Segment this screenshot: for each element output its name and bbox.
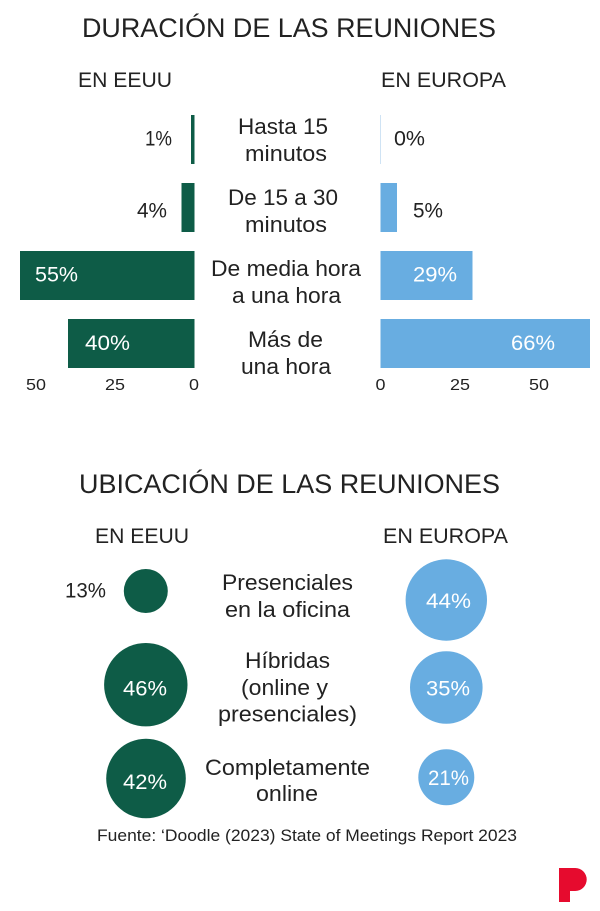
heading: en Europa ubicación: EN EUROPA bbox=[383, 524, 509, 548]
text block: categorías de ubicación: (online y bbox=[241, 675, 328, 700]
text block: categorías de duración bbox=[211, 114, 362, 379]
icon: logo P bbox=[559, 868, 587, 902]
bar chart: Europa duración: 5% bbox=[413, 198, 443, 222]
text block: categorías de duración: De 15 a 30 bbox=[228, 185, 338, 210]
title: ubicación: UBICACIÓN DE LAS REUNIONES bbox=[79, 468, 500, 499]
bar chart: Europa duración bbox=[376, 115, 590, 394]
text block: categorías de duración: Más de bbox=[248, 327, 323, 352]
bubble chart: Europa ubicación: 44% bbox=[426, 589, 471, 613]
bubble chart: Europa ubicación: 35% bbox=[426, 676, 470, 700]
title: duración: DURACIÓN DE LAS REUNIONES bbox=[82, 12, 496, 43]
bar chart: EEUU duración: 0 bbox=[189, 377, 199, 394]
text block: categorías de duración: minutos bbox=[245, 212, 327, 237]
bar chart: Europa duración: 0% bbox=[394, 126, 425, 150]
bar chart: EEUU duración: 50 bbox=[26, 377, 46, 394]
text block: categorías de ubicación: Presenciales bbox=[222, 570, 353, 595]
bubble chart: EEUU ubicación: 42% bbox=[123, 770, 167, 794]
bar chart: Europa duración: 25 bbox=[450, 377, 470, 394]
text block: categorías de ubicación: Híbridas bbox=[245, 648, 330, 673]
text block: categorías de duración: De media hora bbox=[211, 256, 362, 281]
bubble chart: EEUU ubicación: 13% bbox=[65, 578, 106, 602]
text block: categorías de duración: minutos bbox=[245, 141, 327, 166]
text block: categorías de duración: una hora bbox=[241, 354, 332, 379]
bar chart: Europa duración: 66% bbox=[511, 331, 555, 355]
heading: en EEUU ubicación: EN EEUU bbox=[95, 524, 189, 548]
text block: categorías de ubicación: online bbox=[256, 781, 318, 806]
source note: Fuente: ‘Doodle (2023) State of Meetings Report 2023 bbox=[97, 827, 517, 845]
bar chart: EEUU duración: 4% bbox=[137, 198, 167, 222]
bubble chart: Europa ubicación: 21% bbox=[428, 766, 469, 790]
bar chart: EEUU duración: 25 bbox=[105, 377, 125, 394]
bar chart: EEUU duración: 1% bbox=[145, 126, 172, 150]
bubble chart: Europa ubicación bbox=[406, 559, 487, 805]
text block: categorías de ubicación: en la oficina bbox=[225, 597, 351, 622]
heading: en Europa duración: EN EUROPA bbox=[381, 68, 507, 92]
text block: categorías de duración: Hasta 15 bbox=[238, 114, 328, 139]
bar chart: Europa duración: 29% bbox=[413, 262, 457, 286]
bar chart: Europa duración: 0 bbox=[376, 377, 386, 394]
bubble chart: EEUU ubicación bbox=[65, 569, 188, 818]
bar chart: EEUU duración: 55% bbox=[35, 262, 78, 286]
bar chart: EEUU duración: 40% bbox=[85, 331, 130, 355]
bar chart: EEUU duración bbox=[20, 115, 199, 394]
bubble chart: EEUU ubicación: 46% bbox=[123, 676, 167, 700]
text block: categorías de ubicación: presenciales) bbox=[218, 702, 357, 726]
text block: categorías de ubicación bbox=[205, 570, 370, 806]
text block: categorías de duración: a una hora bbox=[232, 283, 342, 308]
bar chart: Europa duración: 50 bbox=[529, 377, 549, 394]
text block: categorías de ubicación: Completamente bbox=[205, 755, 370, 780]
heading: en EEUU duración: EN EEUU bbox=[78, 68, 172, 92]
